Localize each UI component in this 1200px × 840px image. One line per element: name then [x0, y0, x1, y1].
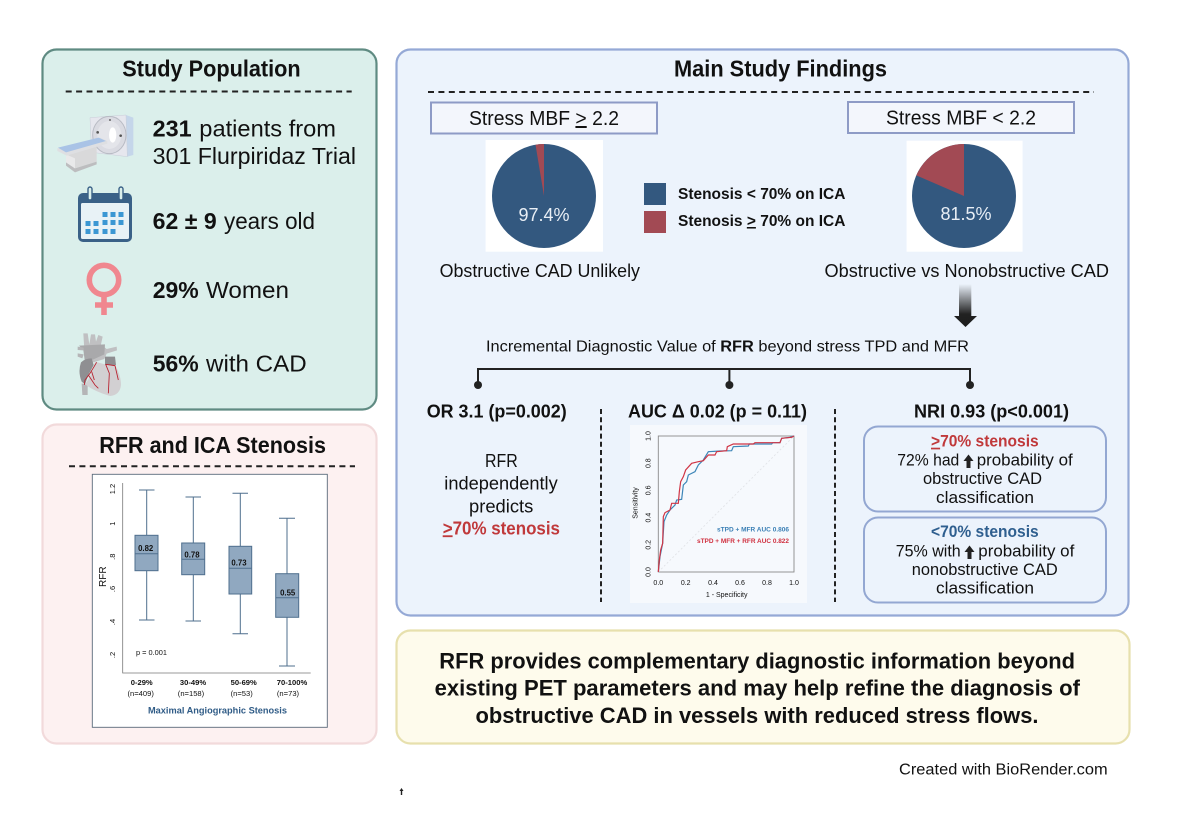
ROC tick labels: 0.0: [653, 580, 663, 587]
ROC tick labels: 0.4: [646, 513, 652, 522]
text: RFR independently predicts: [443, 450, 560, 538]
legend: Stenosis > 70% on ICA: [678, 213, 845, 230]
text: age: 62 ± 9: [153, 208, 217, 234]
callout: below 70% stenosis: probability of: [978, 542, 1075, 561]
callout: above 70% stenosis: >70% stenosis: [931, 432, 1039, 451]
heading: study population: Study Population: [122, 56, 301, 82]
text: CAD: with CAD: [205, 351, 307, 377]
text: CAD: 56%: [153, 351, 199, 377]
y axis tick labels: .8: [108, 554, 117, 560]
bracket connector: [474, 369, 974, 389]
y axis tick labels: .4: [108, 619, 117, 625]
conclusion line 2: existing PET parameters and may help refine the diagnosis of: [435, 676, 1081, 701]
text: RFR independently predicts: predicts: [469, 495, 533, 516]
chart: RFR box plot: [92, 474, 327, 727]
ROC tick labels: [632, 431, 799, 599]
column: odds ratio: [427, 402, 567, 538]
median labels: 0.55: [280, 588, 296, 597]
category labels: (n=73): [277, 689, 300, 698]
category labels: 30-49%: [180, 678, 206, 687]
callout: below 70% stenosis: classification: [936, 579, 1034, 598]
icon: heart: [78, 333, 121, 396]
callout: below 70% stenosis: [864, 518, 1106, 602]
ROC tick labels: 0.8: [646, 458, 652, 468]
column: AUC: [628, 402, 807, 603]
icon: PET scanner: [57, 115, 133, 172]
legend: Stenosis < 70% on ICA: [678, 186, 845, 203]
text: patients: 231: [153, 116, 192, 142]
heading: AUC: AUC Δ 0.02 (p = 0.11): [628, 402, 807, 422]
chart: ROC curves: sTPD + MFR + RFR AUC 0.822: [697, 538, 790, 545]
ROC tick labels: 0.2: [646, 540, 652, 550]
callout: above 70% stenosis: obstructive CAD: [923, 469, 1042, 488]
ROC tick labels: 0.0: [646, 567, 652, 577]
panel: study population: [42, 50, 376, 410]
panel: main study findings: [396, 50, 1128, 616]
conclusion line 3: obstructive CAD in vessels with reduced stress flows.: [476, 703, 1038, 728]
median labels: 0.78: [184, 551, 200, 560]
y axis tick labels: .2: [108, 652, 117, 658]
label box: stress MBF high: Stress MBF > 2.2: [469, 108, 619, 130]
median labels: 0.73: [231, 559, 247, 568]
y axis tick labels: [108, 484, 117, 658]
label box: stress MBF low: Stress MBF < 2.2: [886, 108, 1036, 130]
text: RFR independently predicts: independently: [444, 472, 558, 493]
callout: above 70% stenosis: 72% had: [897, 451, 959, 470]
heading: RFR and ICA stenosis: RFR and ICA Stenosis: [99, 432, 326, 458]
text: trial: 301 Flurpiridaz Trial: [153, 143, 356, 169]
callout: below 70% stenosis: 75% with: [896, 542, 961, 561]
panel: conclusion: [396, 630, 1130, 744]
heading: OR: OR 3.1 (p=0.002): [427, 402, 567, 422]
median labels: 0.82: [138, 544, 154, 553]
ROC tick labels: 1.0: [646, 431, 652, 441]
callout: above 70% stenosis: classification: [936, 488, 1034, 507]
text: women: Women: [206, 277, 289, 303]
y axis title: RFR: [98, 566, 109, 587]
ROC curve: sTPD + MFR: [658, 436, 794, 572]
icon: calendar: [78, 187, 132, 242]
median labels: [138, 544, 296, 597]
icon: female symbol: [89, 265, 119, 315]
legend: [644, 183, 845, 233]
ROC tick labels: 0.6: [735, 580, 745, 587]
category labels: (n=409): [128, 689, 154, 698]
text: age: years old: [224, 208, 315, 234]
heading: NRI: NRI 0.93 (p<0.001): [914, 402, 1069, 422]
chart: ROC curves: [630, 425, 807, 603]
label box: stress MBF low: [848, 102, 1074, 133]
panel: RFR and ICA stenosis: [42, 424, 376, 744]
ROC tick labels: 0.2: [681, 580, 691, 587]
conclusion line 1: RFR provides complementary diagnostic information beyond: [439, 648, 1075, 673]
callout: above 70% stenosis: [864, 426, 1106, 512]
text: incremental diagnostic value: Incremental Diagnostic Value of RFR beyond stress TPD and MFR: [486, 338, 969, 356]
small arrow mark: [400, 788, 404, 795]
text: patients: patients from: [199, 116, 336, 142]
caption: obstructive vs nonobstructive: Obstructive vs Nonobstructive CAD: [824, 260, 1109, 281]
pie chart: obstructive CAD unlikely: [486, 140, 603, 252]
ROC tick labels: 1.0: [789, 580, 799, 587]
ROC tick labels: 1 - Specificity: [706, 592, 748, 599]
callout: above 70% stenosis: probability of: [977, 451, 1073, 470]
category labels: 70-100%: [277, 678, 307, 687]
ROC legend: sTPD + MFR AUC 0.806: [717, 527, 790, 534]
pie chart: obstructive CAD unlikely: 97.4%: [518, 205, 570, 225]
category labels: (n=158): [178, 689, 205, 698]
text: RFR independently predicts: RFR: [485, 450, 518, 471]
ROC curve: sTPD + MFR + RFR: [658, 436, 794, 572]
callout: below 70% stenosis: nonobstructive CAD: [912, 560, 1058, 579]
ROC tick labels: Sensitivity: [632, 487, 640, 519]
ROC tick labels: 0.4: [708, 580, 718, 587]
category labels: 50-69%: [231, 678, 257, 687]
callout: below 70% stenosis: <70% stenosis: [931, 522, 1039, 541]
pie chart: obstructive vs nonobstructive CAD: 81.5%: [940, 204, 992, 224]
arrow: down: [954, 284, 977, 327]
ROC tick labels: 0.8: [762, 580, 772, 587]
y axis tick labels: 1: [108, 522, 117, 526]
label box: stress MBF high: [431, 102, 657, 134]
ROC tick labels: 0.6: [646, 485, 652, 495]
credit: Created with BioRender.com: [899, 761, 1108, 778]
heading: main study findings: Main Study Findings: [674, 56, 887, 82]
boxes and whiskers: [135, 490, 299, 666]
column: NRI: [864, 402, 1106, 602]
category labels: (n=53): [231, 689, 253, 698]
caption: obstructive CAD unlikely: Obstructive CAD Unlikely: [440, 260, 641, 281]
p value: p = 0.001: [136, 648, 167, 657]
y axis tick labels: 1.2: [108, 484, 117, 494]
y axis tick labels: .6: [108, 586, 117, 592]
pie chart: obstructive vs nonobstructive CAD: [907, 141, 1023, 252]
x axis title: Maximal Angiographic Stenosis: [148, 705, 287, 715]
category labels: 0-29%: [131, 678, 153, 687]
category labels: [128, 678, 307, 698]
text: women: 29%: [153, 277, 199, 303]
text: RFR independently predicts: >70% stenosis: [443, 517, 560, 538]
